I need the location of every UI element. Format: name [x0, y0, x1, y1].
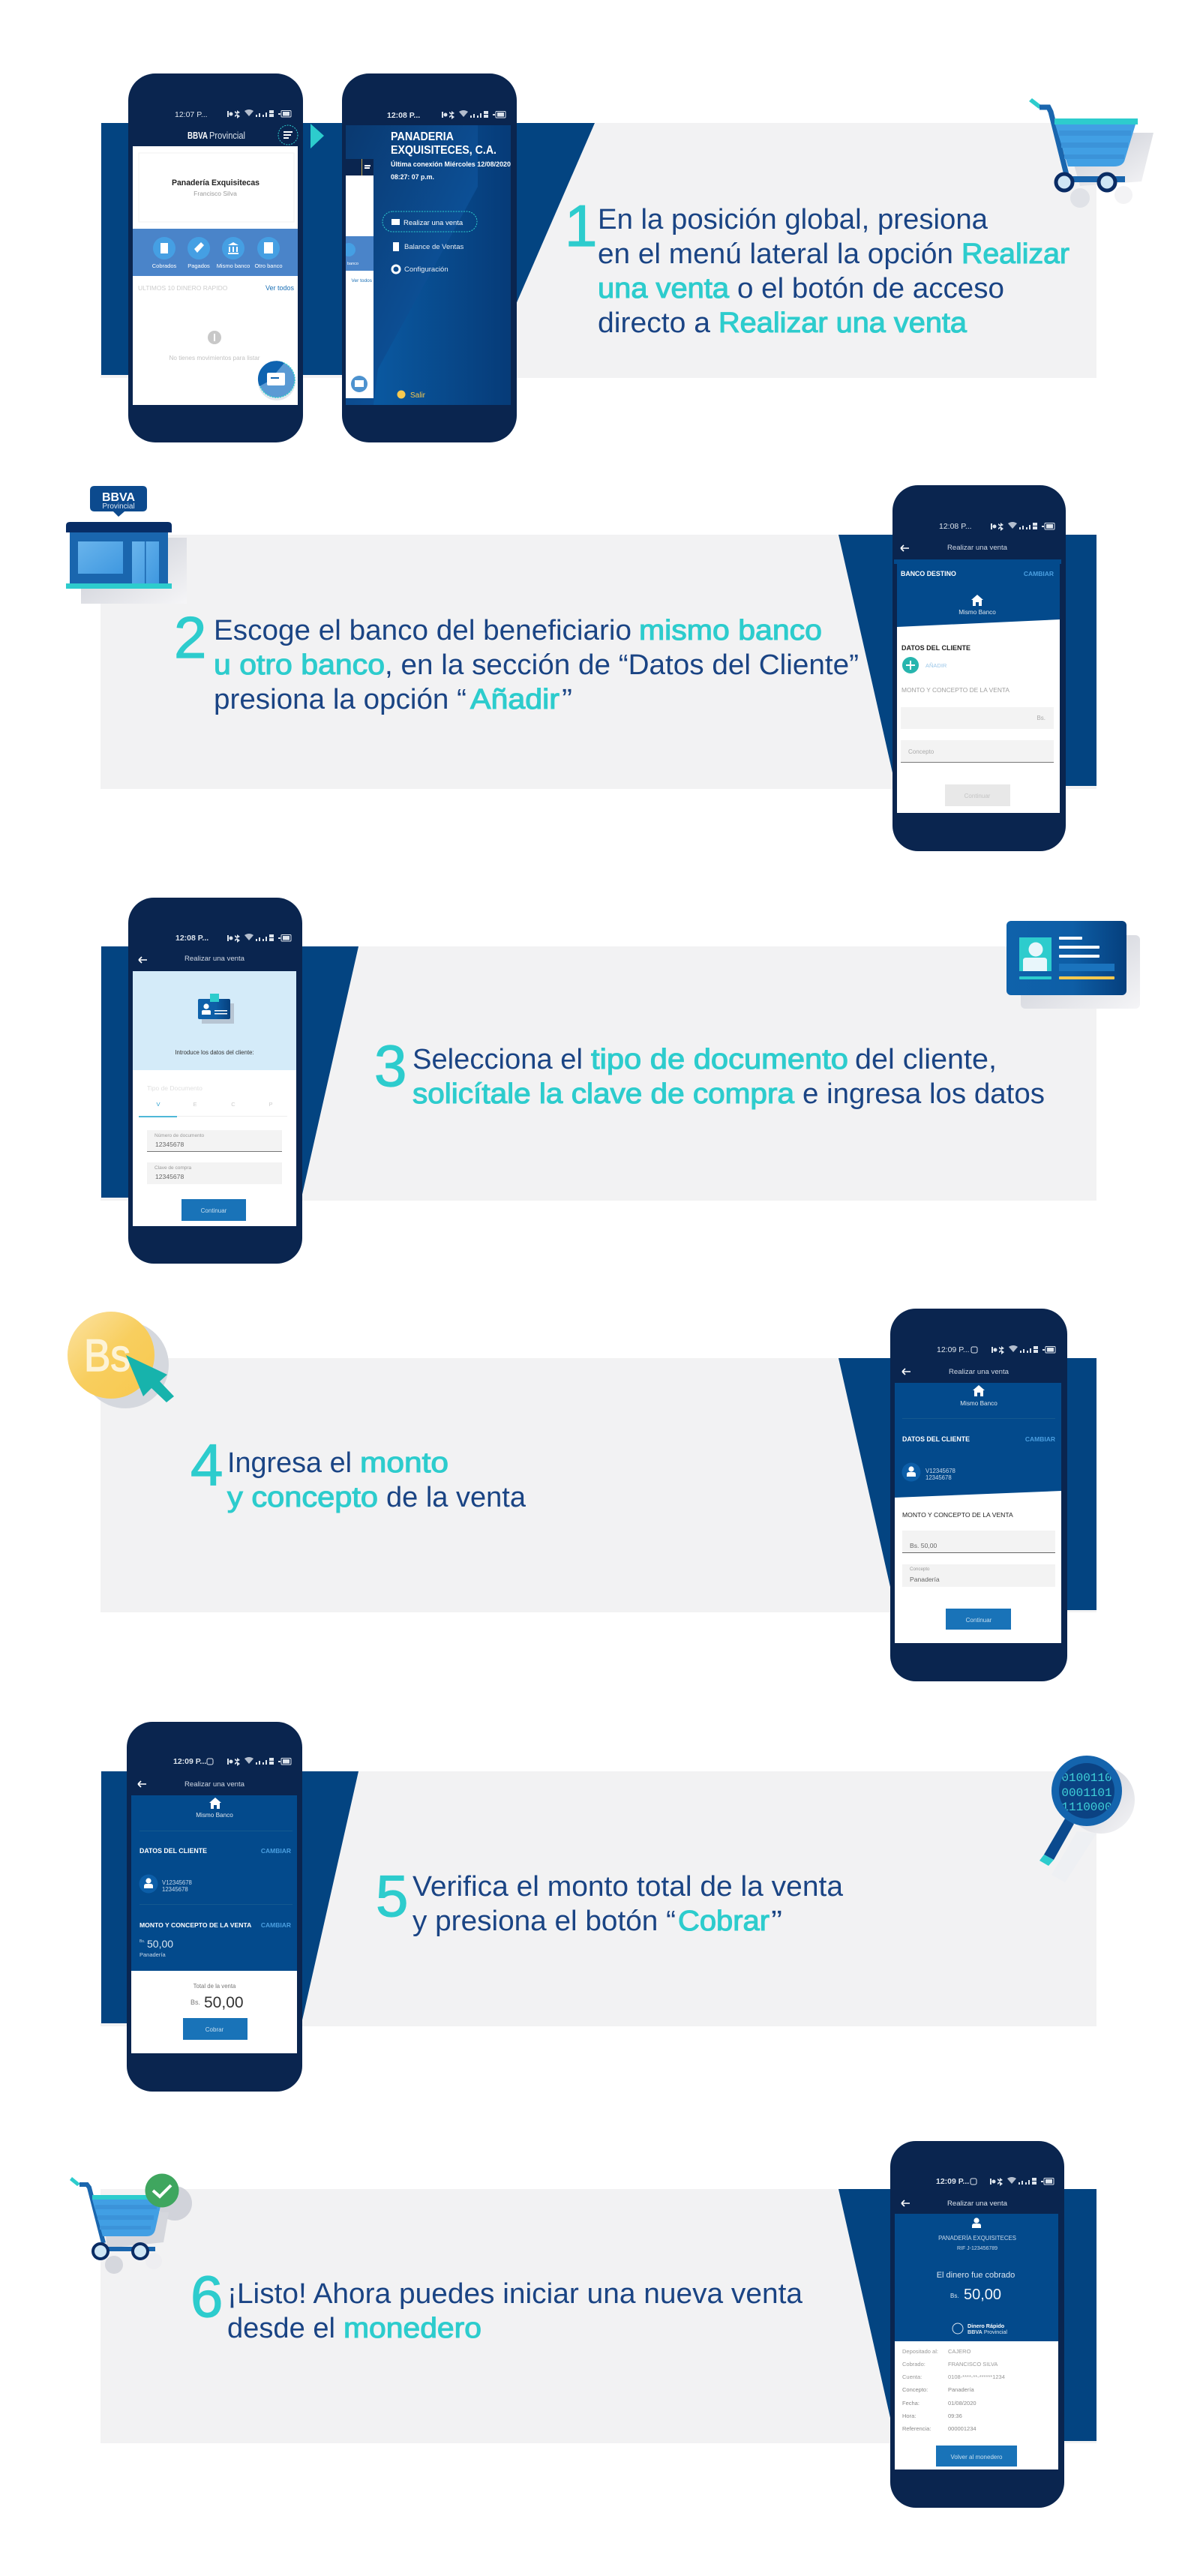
step 6 text: ¡Listo! Ahora puedes iniciar una nueva venta — [227, 2278, 803, 2310]
client data: AÑADIR — [926, 662, 947, 669]
blue summary: Bs. — [140, 1939, 145, 1944]
client data: DATOS DEL CLIENTE — [902, 644, 970, 652]
step 1 text: directo a — [598, 307, 711, 339]
icon: bank branch: BBVA — [102, 491, 135, 504]
step 5 text — [412, 1871, 844, 1937]
amount and concept form: Concepto — [910, 1567, 930, 1572]
last connection — [391, 160, 511, 181]
account card: Francisco Silva — [194, 190, 237, 197]
icon: magnifier with binary: 0001101 — [1061, 1786, 1112, 1800]
status bar — [173, 1757, 291, 1766]
sale total: Total de la venta — [194, 1983, 236, 1990]
status bar — [936, 2177, 1054, 2186]
light blue header: Introduce los datos del cliente: — [175, 1049, 254, 1056]
icon: magnifier with binary: 1110000 — [1061, 1801, 1112, 1814]
app bar: Realizar una venta — [947, 2200, 1008, 2208]
blue header: Mismo Banco — [958, 609, 996, 616]
status bar — [387, 110, 506, 120]
shortcuts band: Pagados — [188, 262, 210, 269]
amount and concept form: MONTO Y CONCEPTO DE LA VENTA — [902, 1511, 1013, 1519]
account card — [139, 153, 294, 222]
app bar — [902, 2200, 1008, 2208]
step 6 background — [100, 2189, 1096, 2443]
step 1 number: 1 — [565, 193, 597, 259]
menu item: realizar una venta — [382, 211, 477, 232]
icon: id card — [1006, 921, 1140, 1009]
icon: shopping cart — [1029, 98, 1154, 208]
blue summary: 50,00 — [147, 1938, 173, 1950]
last connection: 08:27: 07 p.m. — [391, 172, 434, 181]
blue header: BANCO DESTINO — [901, 570, 956, 577]
app bar: Realizar una venta — [949, 1368, 1010, 1376]
continue button — [182, 1199, 246, 1221]
app bar: Realizar una venta — [184, 1780, 245, 1789]
receipt details: CAJERO — [948, 2348, 971, 2355]
panel: step 2 — [66, 485, 1096, 851]
empty state: No tienes movimientos para listar — [169, 355, 260, 361]
company name: EXQUISITECES, C.A. — [391, 144, 496, 157]
receipt details: 01/08/2020 — [948, 2400, 976, 2407]
charge button: Cobrar — [206, 2026, 224, 2033]
step 3 background — [100, 946, 1096, 1201]
receipt details: 09:36 — [948, 2413, 962, 2419]
list heading: ULTIMOS 10 DINERO RAPIDO — [138, 284, 228, 292]
document type tabs: V — [156, 1101, 160, 1108]
disabled button: Continuar — [964, 793, 991, 799]
screen — [133, 971, 296, 1226]
status bar — [937, 1345, 1055, 1354]
app bar — [139, 955, 245, 963]
blue confirmation: Bs. — [950, 2293, 959, 2299]
step 2 text: , en la sección de “Datos del Cliente” — [385, 649, 859, 681]
sale total — [131, 1971, 297, 2053]
screen — [897, 566, 1060, 813]
purchase key field — [147, 1162, 282, 1184]
shortcuts band: Cobrados — [152, 262, 177, 269]
icon: coin with cursor: Bs — [84, 1330, 130, 1381]
menu button — [278, 125, 298, 145]
step 5 blue band — [101, 1771, 358, 2023]
step 6 text — [227, 2278, 803, 2344]
panel: step 1 — [100, 73, 1154, 442]
light blue header — [133, 971, 296, 1070]
main screen peeking — [346, 159, 374, 398]
step 3 text: tipo de documento — [591, 1044, 848, 1075]
step 1 text: Realizar — [962, 238, 1070, 270]
step 2 text: presiona la opción “ — [214, 684, 466, 715]
status bar: 12:09 P... — [937, 1345, 970, 1354]
document number field: Número de documento — [154, 1133, 205, 1138]
blue confirmation: BBVA Provincial — [968, 2329, 1007, 2335]
document type tabs: C — [231, 1101, 236, 1108]
header title — [188, 130, 245, 141]
status bar: 12:08 P... — [939, 522, 972, 531]
step 3 blue band — [101, 946, 358, 1198]
amount and concept form — [901, 686, 1054, 763]
step 6 number: 6 — [190, 2263, 223, 2329]
step 2 phone: destination bank — [892, 485, 1066, 851]
step 4 text: de la venta — [386, 1482, 526, 1513]
step 3 text: Selecciona el — [412, 1044, 583, 1075]
continue button: Continuar — [966, 1617, 992, 1624]
step 2 text: Añadir — [470, 684, 560, 715]
step 3 text — [412, 1044, 1045, 1110]
list heading — [138, 284, 294, 292]
step 6 phone: receipt — [890, 2141, 1064, 2508]
step 1 phone: side menu — [342, 73, 517, 442]
step 2 background — [100, 535, 1096, 789]
purchase key field: 12345678 — [155, 1173, 184, 1180]
client data — [902, 644, 970, 673]
sale total: Bs. — [190, 1999, 200, 2006]
step 5 text: Cobrar — [678, 1906, 770, 1937]
screen — [895, 1383, 1061, 1643]
list heading: Ver todos — [266, 284, 294, 292]
receipt details: FRANCISCO SILVA — [948, 2361, 998, 2368]
blue header — [894, 559, 1061, 627]
blue summary: 12345678 — [926, 1474, 952, 1481]
panel: step 3 — [100, 898, 1140, 1264]
blue summary: CAMBIAR — [261, 1847, 291, 1855]
step 6 text: desde el — [227, 2313, 335, 2344]
blue summary: V12345678 — [926, 1468, 956, 1474]
step 1 text: Realizar una venta — [718, 307, 968, 339]
document type tabs: Tipo de Documento — [147, 1084, 202, 1092]
menu background — [346, 125, 511, 405]
step 5 phone: summary — [127, 1722, 302, 2092]
step 1 text: en el menú lateral la opción — [598, 238, 953, 270]
status bar: 12:07 P... — [175, 110, 208, 119]
step 1 text: o el botón de acceso — [737, 273, 1004, 304]
step 6 text: monedero — [344, 2313, 482, 2344]
step 4 text: y concepto — [227, 1482, 378, 1513]
icon: bank branch: Provincial — [102, 502, 135, 511]
step 6 blue band — [838, 2189, 1096, 2441]
blue summary: Mismo Banco — [960, 1400, 998, 1407]
blue summary: V12345678 — [162, 1879, 192, 1886]
step 2 text: Escoge el banco del beneficiario — [214, 615, 632, 646]
arrow: between phones — [310, 124, 324, 148]
receipt details: Hora: — [902, 2413, 916, 2419]
blue confirmation: Dinero Rápido — [968, 2323, 1005, 2329]
receipt details: Cobrado: — [902, 2361, 926, 2368]
step 4 number: 4 — [190, 1432, 223, 1498]
step 3 text: del cliente, — [855, 1044, 997, 1075]
receipt details — [895, 2341, 1058, 2470]
step 2 text: mismo banco — [639, 615, 822, 646]
blue summary: DATOS DEL CLIENTE — [140, 1847, 207, 1855]
status bar: 12:09 P... — [936, 2177, 969, 2186]
document type tabs — [139, 1084, 287, 1117]
step 3 number: 3 — [374, 1033, 406, 1099]
panel: step 6 — [70, 2141, 1096, 2508]
blue summary: Panadería — [140, 1951, 166, 1958]
account card: Panadería Exquisitecas — [172, 178, 260, 187]
document type tabs: P — [268, 1101, 273, 1108]
icon: bank branch — [66, 486, 187, 604]
receipt details: 000001234 — [948, 2425, 976, 2432]
status bar — [175, 109, 291, 119]
panel: step 5 — [100, 1722, 1135, 2092]
sale total: 50,00 — [204, 1994, 244, 2011]
blue summary: CAMBIAR — [1025, 1435, 1055, 1443]
charge button — [183, 2018, 248, 2040]
back button: Volver al monedero — [951, 2454, 1003, 2461]
blue confirmation — [895, 2214, 1058, 2341]
document number field: 12345678 — [155, 1141, 184, 1148]
step 3 text: solicítale la clave de compra — [412, 1078, 795, 1110]
amount and concept form: Concepto — [908, 748, 934, 755]
blue confirmation: PANADERÍA EXQUISITECES — [938, 2235, 1016, 2242]
blue confirmation: El dinero fue cobrado — [937, 2271, 1015, 2280]
step 2 blue band — [838, 535, 1096, 786]
main screen peeking: Ver todos — [352, 278, 373, 283]
step 5 text: ” — [771, 1906, 782, 1937]
menu item: salir: Salir — [410, 391, 426, 400]
header title: Provincial — [209, 130, 245, 141]
company name — [391, 130, 496, 157]
shortcuts band: Otro banco — [254, 262, 283, 269]
step 5 background — [100, 1771, 1096, 2026]
receipt details: Panadería — [948, 2386, 974, 2393]
blue summary: Mismo Banco — [196, 1812, 233, 1819]
last connection: Última conexión Miércoles 12/08/2020 — [391, 160, 511, 168]
blue summary: 12345678 — [162, 1886, 188, 1893]
step 1 text — [598, 204, 1070, 339]
amount and concept form: Bs. 50,00 — [910, 1542, 938, 1549]
step 4 background — [100, 1358, 1096, 1612]
status bar — [939, 522, 1054, 531]
blue header: CAMBIAR — [1024, 570, 1054, 577]
receipt details: 0108-****-**-******1234 — [948, 2374, 1005, 2380]
header title: BBVA — [188, 130, 208, 141]
blue confirmation: 50,00 — [964, 2287, 1001, 2303]
step 1 text: una venta — [598, 273, 730, 304]
continue button — [946, 1609, 1011, 1630]
step 4 blue band — [838, 1358, 1096, 1610]
menu item: salir — [398, 390, 426, 400]
amount and concept form: MONTO Y CONCEPTO DE LA VENTA — [902, 686, 1010, 694]
back button — [936, 2446, 1017, 2467]
app bar: Realizar una venta — [184, 955, 245, 963]
step 4 phone: amount form — [890, 1309, 1067, 1681]
step 2 text: ” — [562, 684, 572, 715]
step 3 phone: document form — [128, 898, 302, 1264]
blue summary: MONTO Y CONCEPTO DE LA VENTA — [140, 1921, 251, 1929]
step 5 number: 5 — [376, 1863, 408, 1929]
step 4 text: Ingresa el — [227, 1447, 352, 1479]
company name: PANADERIA — [391, 130, 454, 143]
floating action button — [258, 361, 296, 400]
receipt details: Referencia: — [902, 2425, 931, 2432]
disabled button — [945, 784, 1010, 806]
purchase key field: Clave de compra — [154, 1165, 192, 1171]
document type tabs: E — [193, 1101, 197, 1108]
blue summary — [895, 1383, 1061, 1498]
menu item: realizar una venta: Realizar una venta — [404, 219, 464, 227]
screen — [133, 146, 298, 405]
menu item: configuracion: Configuración — [404, 265, 448, 274]
step 1 background — [100, 123, 1096, 378]
shortcuts band — [133, 229, 298, 276]
empty state — [169, 331, 260, 361]
receipt details: Depositado al: — [902, 2348, 938, 2355]
step 4 text: monto — [360, 1447, 448, 1479]
shortcuts band: Mismo banco — [217, 262, 250, 269]
receipt details: Fecha: — [902, 2400, 920, 2407]
step 1 phone: home screen — [128, 73, 303, 442]
icon: magnifier with binary: 0100110 — [1061, 1771, 1112, 1785]
blue summary: DATOS DEL CLIENTE — [902, 1435, 970, 1443]
status bar — [176, 934, 291, 943]
panel: step 4 — [68, 1309, 1096, 1681]
blue confirmation: RIF J-123456789 — [957, 2246, 998, 2251]
status bar: 12:09 P... — [173, 1757, 206, 1766]
icon: magnifier with binary — [1040, 1756, 1135, 1866]
receipt details: Cuenta: — [902, 2374, 922, 2380]
blue summary — [131, 1795, 297, 1971]
status bar: 12:08 P... — [387, 111, 420, 120]
amount and concept form — [902, 1511, 1055, 1587]
step 1 text: En la posición global, presiona — [598, 204, 988, 235]
blue summary: CAMBIAR — [261, 1921, 291, 1929]
continue button: Continuar — [201, 1207, 227, 1214]
icon: cart with check — [70, 2173, 192, 2274]
step 2 text — [214, 615, 859, 715]
menu item: balance: Balance de Ventas — [404, 243, 464, 251]
amount and concept form: Bs. — [1036, 715, 1046, 721]
receipt details: Concepto: — [902, 2386, 928, 2393]
step 3 text: e ingresa los datos — [802, 1078, 1045, 1110]
step 5 text: Verifica el monto total de la venta — [412, 1871, 844, 1903]
app bar — [902, 1368, 1010, 1376]
document number field — [147, 1130, 282, 1152]
main screen peeking: banco — [347, 262, 358, 266]
icon: coin with cursor — [68, 1312, 174, 1408]
step 4 text — [227, 1447, 526, 1513]
app bar — [901, 544, 1008, 552]
app bar — [138, 1780, 245, 1789]
step 1 blue band — [101, 123, 595, 375]
app bar: Realizar una venta — [947, 544, 1008, 552]
step 2 text: u otro banco — [214, 649, 385, 681]
status bar: 12:08 P... — [176, 934, 208, 943]
step 2 number: 2 — [174, 604, 206, 670]
step 5 text: y presiona el botón “ — [412, 1906, 676, 1937]
amount and concept form: Panadería — [910, 1576, 940, 1583]
